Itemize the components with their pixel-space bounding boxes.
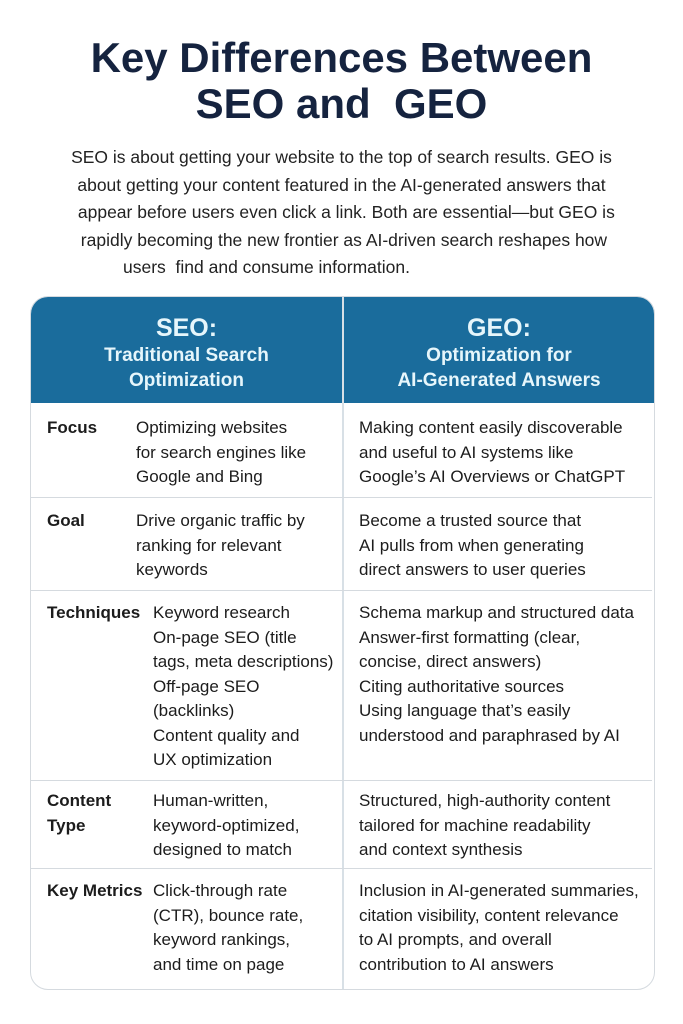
row: Key Metrics: contribution to AI answers [359,954,554,974]
row: Focus: and useful to AI systems like [359,442,574,462]
row: Goal: Become a trusted source that [359,511,581,530]
subtitle: appear before users even click a link. Both are essential—but GEO is [78,202,615,222]
row: Key Metrics: to AI prompts, and overall [359,930,552,949]
title [91,34,592,127]
title: Key Differences Between [91,34,592,81]
header: GEO: GEO: [467,314,531,342]
row: Key Metrics: (CTR), bounce rate, [153,906,303,924]
header: SEO: Optimization [129,370,244,391]
row: Techniques: Answer-first formatting (clear, [359,628,580,646]
row: Techniques: Keyword research [153,603,290,622]
row: Techniques: Content quality and [153,726,300,744]
row: Techniques [47,603,634,769]
row: Techniques: UX optimization [153,750,272,769]
row: Goal: Drive organic traffic by [136,511,305,530]
row: Goal: ranking for relevant [136,536,282,554]
row: Content Type [47,791,610,859]
subtitle: rapidly becoming the new frontier as AI-driven search reshapes how [81,230,607,250]
row: Focus: for search engines like [136,442,306,462]
row: Techniques: On-page SEO (title [153,628,297,646]
row: Key Metrics: citation visibility, content relevance [359,906,619,924]
row: Key Metrics: keyword rankings, [153,930,290,949]
row: Content Type: and context synthesis [359,840,522,859]
row: Focus: Google and Bing [136,467,263,486]
header: SEO [31,297,342,403]
row: Techniques: Techniques [47,603,140,622]
row: Focus [47,418,625,486]
row: Focus: Making content easily discoverable [359,418,623,437]
row: Focus: Optimizing websites [136,418,287,437]
row: Key Metrics: Inclusion in AI-generated summaries, [359,881,639,900]
row: Techniques: concise, direct answers) [359,652,541,671]
header: GEO: Optimization for [426,345,572,366]
row: Content Type: tailored for machine readability [359,816,591,834]
subtitle: users find and consume information. [123,257,410,277]
row: Content Type: Human-written, [153,791,268,810]
row: Content Type: designed to match [153,840,292,859]
row: Key Metrics: and time on page [153,954,284,974]
row: Techniques: Using language that’s easily [359,701,570,720]
header: GEO [344,297,654,403]
row: Techniques: understood and paraphrased by AI [359,726,620,744]
header: SEO: SEO: [156,314,217,342]
subtitle: about getting your content featured in the AI-generated answers that [77,174,606,194]
row: Goal: AI pulls from when generating [359,536,584,554]
row: Focus: Focus [47,418,97,437]
header: SEO: Traditional Search [104,345,269,366]
row: Techniques: Schema markup and structured data [359,603,634,622]
row: Content Type: keyword-optimized, [153,816,299,834]
row: Key Metrics: Click-through rate [153,881,287,900]
row: Key Metrics: Key Metrics [47,881,142,900]
row: Focus: Google’s AI Overviews or ChatGPT [359,467,625,486]
row: Techniques: Off-page SEO [153,676,259,696]
row: Goal: keywords [136,560,208,579]
header: GEO: AI-Generated Answers [397,370,601,391]
title: SEO and GEO [196,80,487,127]
subtitle: SEO is about getting your website to the top of search results. GEO is [71,147,612,167]
row: Goal: direct answers to user queries [359,560,586,579]
row: Techniques: tags, meta descriptions) [153,652,333,671]
row: Content Type: Structured, high-authority content [359,791,610,810]
row: Content Type: Content [47,791,111,810]
row: Techniques: (backlinks) [153,701,234,720]
row: Goal [47,511,586,579]
row: Content Type: Type [47,816,85,834]
subtitle [71,147,615,277]
row: Key Metrics [47,881,639,974]
comparison table [30,296,655,990]
row: Goal: Goal [47,511,85,530]
row: Techniques: Citing authoritative sources [359,676,564,696]
